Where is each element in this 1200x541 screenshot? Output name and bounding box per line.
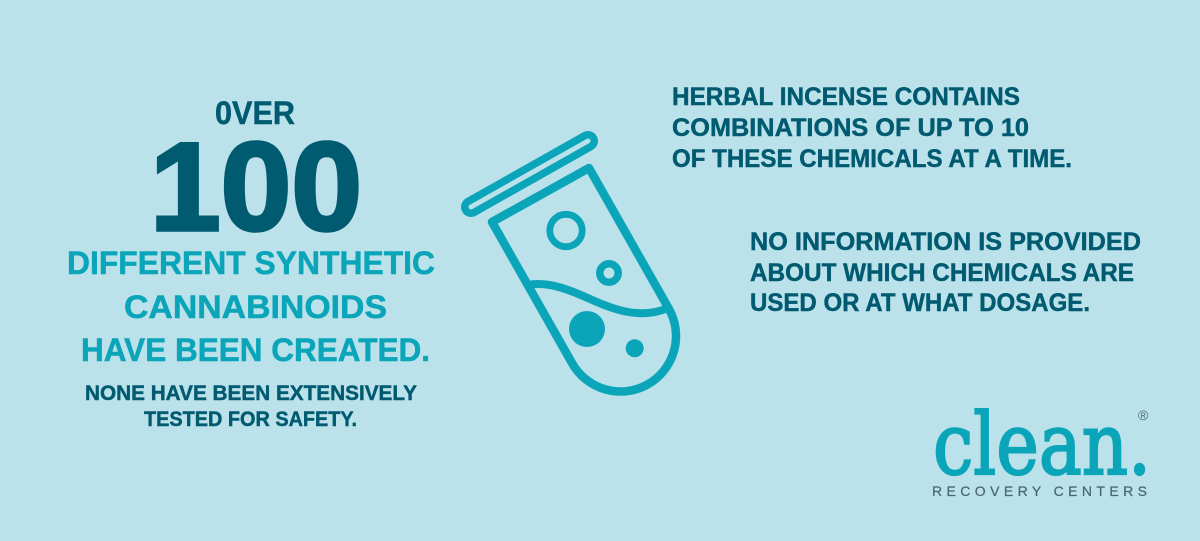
statement: different synthetic cannabinoids: DIFFERENT SYNTHETIC [67, 245, 435, 281]
liquid wave [528, 284, 668, 313]
statement: different synthetic cannabinoids [67, 245, 435, 368]
text block: no information: NO INFORMATION IS PROVIDED [750, 228, 1141, 256]
text block: no information: USED OR AT WHAT DOSAGE. [750, 289, 1090, 317]
text block: herbal incense: COMBINATIONS OF UP TO 10 [672, 114, 1029, 142]
icon: test tube [471, 141, 676, 392]
logo tagline: RECOVERY CENTERS [932, 483, 1147, 499]
note: safety testing: NONE HAVE BEEN EXTENSIVELY [85, 381, 417, 405]
note: safety testing: TESTED FOR SAFETY. [144, 407, 357, 431]
logo: clean recovery centers [932, 396, 1151, 499]
registered mark: ® [1138, 407, 1149, 423]
text block: herbal incense [672, 83, 1072, 173]
text block: no information [750, 228, 1141, 317]
tube body [492, 168, 676, 392]
note: safety testing [85, 381, 417, 431]
bubbles [550, 214, 644, 357]
text block: no information: ABOUT WHICH CHEMICALS ARE [750, 259, 1134, 287]
text block: herbal incense: HERBAL INCENSE CONTAINS [672, 83, 1020, 111]
statement: different synthetic cannabinoids: CANNABINOIDS [124, 289, 387, 325]
tube cap [471, 141, 588, 207]
heading: over: 0VER [215, 95, 295, 131]
panel: left statistic [67, 95, 435, 431]
statement: different synthetic cannabinoids: HAVE BEEN CREATED. [81, 332, 430, 368]
logo wordmark: clean. [933, 396, 1151, 495]
big number: 100: 100 [150, 118, 362, 257]
text block: herbal incense: OF THESE CHEMICALS AT A TIME. [672, 145, 1072, 173]
